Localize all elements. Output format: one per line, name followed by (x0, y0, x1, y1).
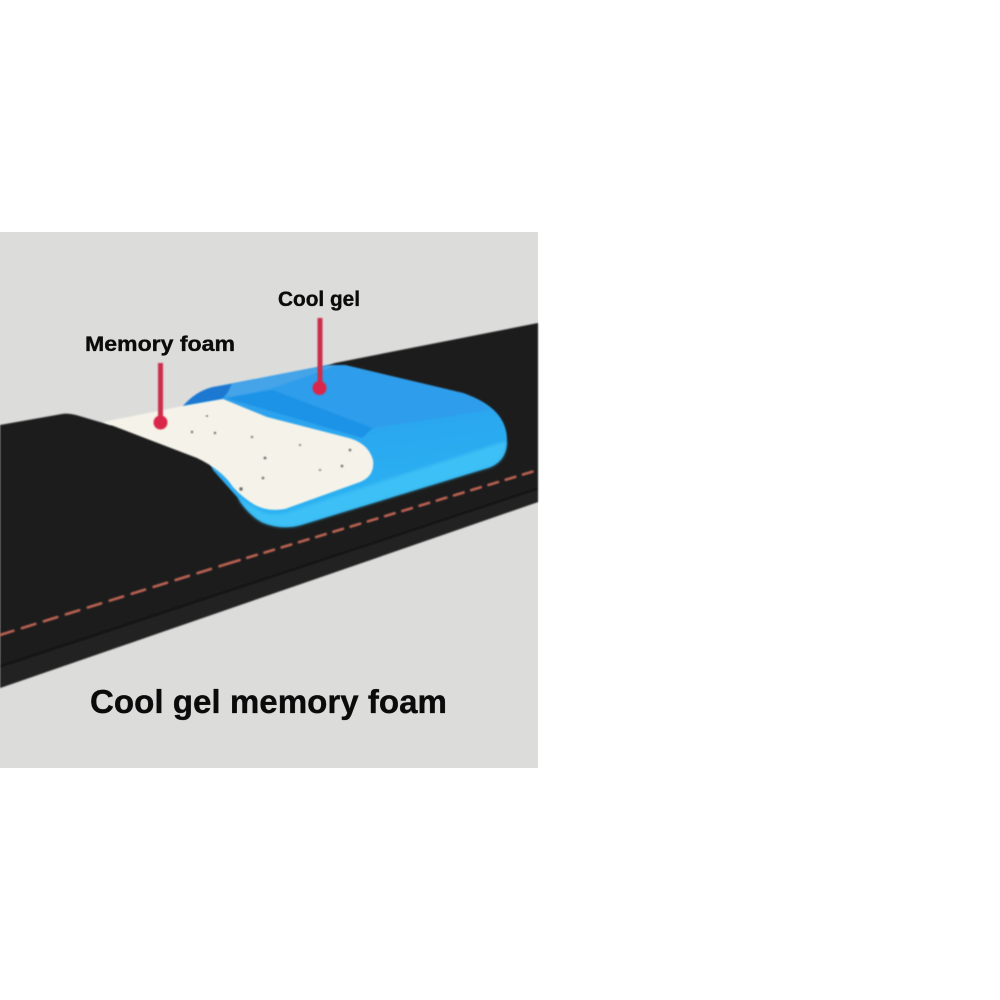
label: memory foam: Memory foam (85, 333, 235, 356)
gel lower lip highlight (238, 441, 506, 527)
panel: grey background (0, 232, 538, 768)
cushion: black wrist rest (0, 323, 538, 688)
caption: Cool gel memory foam (90, 683, 447, 720)
stitching: red dashed seam (0, 470, 538, 635)
pointer: memory foam (154, 363, 168, 430)
foam speckles (191, 415, 351, 491)
foam layer: white memory foam (103, 399, 373, 510)
gel layer: blue cool gel (183, 365, 507, 527)
label: cool gel: Cool gel (278, 288, 360, 311)
pointer: cool gel (312, 318, 326, 395)
